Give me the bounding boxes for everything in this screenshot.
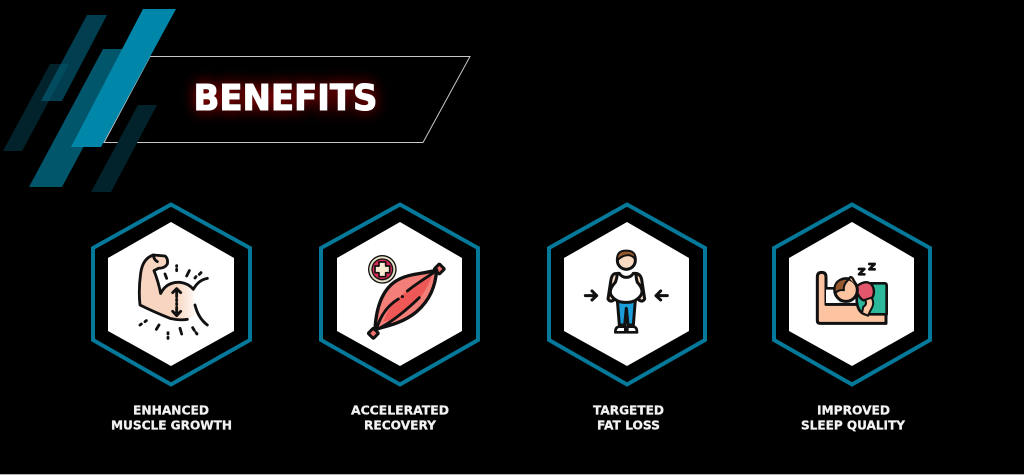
title: BENEFITS xyxy=(194,78,378,119)
hexagon background xyxy=(337,222,462,366)
header frame xyxy=(104,56,470,142)
panel: enhanced muscle growth xyxy=(93,204,250,384)
label: enhanced muscle growth: ENHANCED xyxy=(133,402,209,418)
hexagon background xyxy=(789,222,914,366)
icon: pillow xyxy=(826,288,840,304)
icon: muscle with medical badge xyxy=(368,255,445,339)
hexagon frame xyxy=(549,204,705,384)
bottom edge line xyxy=(0,474,1024,475)
label: enhanced muscle growth xyxy=(111,402,232,432)
label: accelerated recovery: ACCELERATED xyxy=(351,402,449,418)
label: accelerated recovery: RECOVERY xyxy=(364,418,437,432)
icon: medical badge xyxy=(368,255,397,284)
panel: accelerated recovery xyxy=(321,204,478,384)
label: targeted fat loss: FAT LOSS xyxy=(597,418,660,432)
icon: person with inward arrows xyxy=(585,251,667,332)
icon: arms xyxy=(608,274,645,301)
hexagon frame xyxy=(93,204,250,384)
icon: trousers xyxy=(617,300,635,325)
icon: arm xyxy=(862,298,873,316)
decorative diagonal stripes xyxy=(3,9,176,192)
icon: bed xyxy=(817,272,886,323)
icon: tendons xyxy=(368,264,445,339)
label: targeted fat loss: TARGETED xyxy=(593,402,664,418)
icon: muscle belly xyxy=(375,270,437,329)
icon: blanket xyxy=(857,283,887,314)
icon: shirt xyxy=(857,282,874,300)
panel: targeted fat loss xyxy=(549,204,705,384)
label: targeted fat loss xyxy=(593,402,664,432)
icon: person sleeping in bed xyxy=(817,264,887,323)
label: accelerated recovery xyxy=(351,402,449,432)
icon: head xyxy=(835,279,857,301)
panel: improved sleep quality xyxy=(774,204,930,384)
icon: vest and belly xyxy=(610,273,642,302)
hexagon frame xyxy=(774,204,930,384)
icon: head xyxy=(617,251,635,269)
hexagon background xyxy=(108,222,234,366)
icon: inward arrows xyxy=(585,291,667,300)
label: improved sleep quality xyxy=(801,402,906,432)
hexagon background xyxy=(564,222,689,366)
icon: shoes xyxy=(615,327,637,332)
label: improved sleep quality: SLEEP QUALITY xyxy=(801,418,906,432)
hexagon frame xyxy=(321,204,478,384)
label: improved sleep quality: IMPROVED xyxy=(817,402,890,418)
icon: sleep z letters xyxy=(859,264,875,274)
label: enhanced muscle growth: MUSCLE GROWTH xyxy=(111,418,232,432)
icon: flexed arm xyxy=(139,255,207,338)
